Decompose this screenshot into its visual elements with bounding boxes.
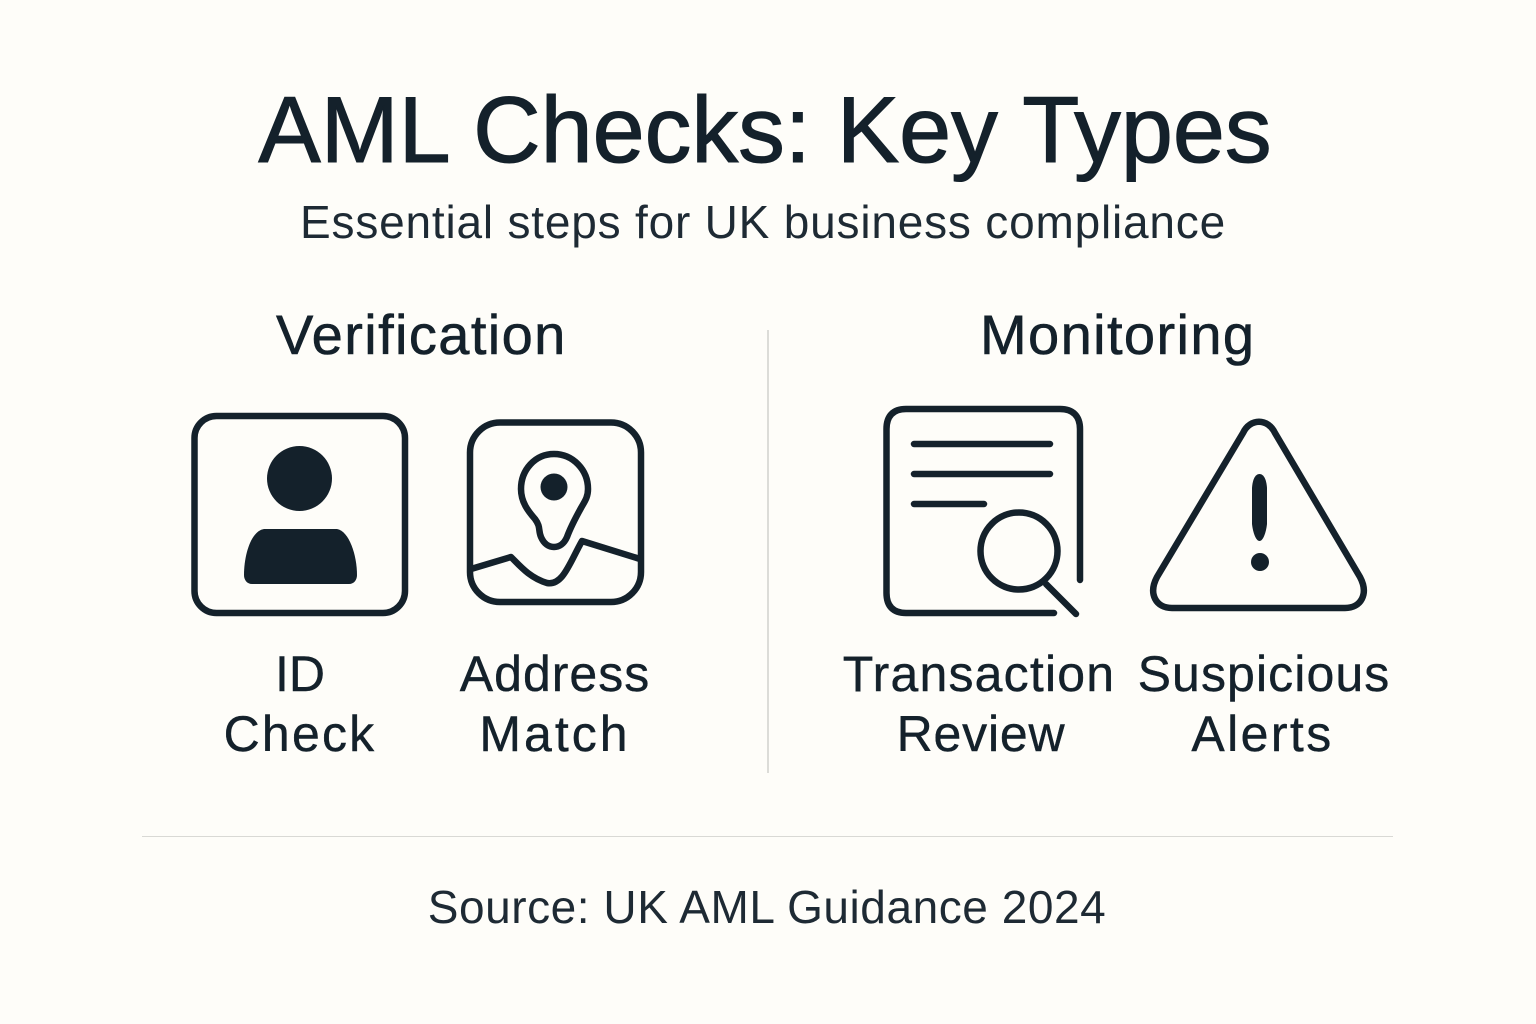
heading: monitoring: Monitoring — [980, 303, 1255, 366]
label: transaction review: Transaction — [843, 646, 1115, 702]
label: address match — [460, 646, 650, 762]
label: suspicious alerts: Alerts — [1191, 706, 1334, 762]
title: AML Checks: Key Types — [258, 77, 1272, 182]
footer divider — [142, 836, 1393, 837]
centre divider — [767, 330, 769, 773]
label: id check: Check — [224, 706, 376, 762]
icon: suspicious alerts — [1150, 418, 1368, 612]
icon: address match — [466, 419, 644, 606]
label: transaction review: Review — [897, 706, 1065, 762]
icon: id check — [191, 412, 408, 616]
label: suspicious alerts: Suspicious — [1138, 646, 1390, 702]
subtitle: Essential steps for UK business compliance — [300, 196, 1226, 248]
icon: transaction review — [883, 406, 1084, 618]
label: id check: ID — [275, 646, 325, 702]
label: id check — [224, 646, 376, 762]
label: address match: Address — [460, 646, 650, 702]
source note: Source: UK AML Guidance 2024 — [428, 881, 1106, 933]
label: transaction review — [843, 646, 1115, 762]
label: address match: Match — [479, 706, 631, 762]
label: suspicious alerts — [1138, 646, 1390, 762]
heading: verification: Verification — [276, 303, 567, 366]
